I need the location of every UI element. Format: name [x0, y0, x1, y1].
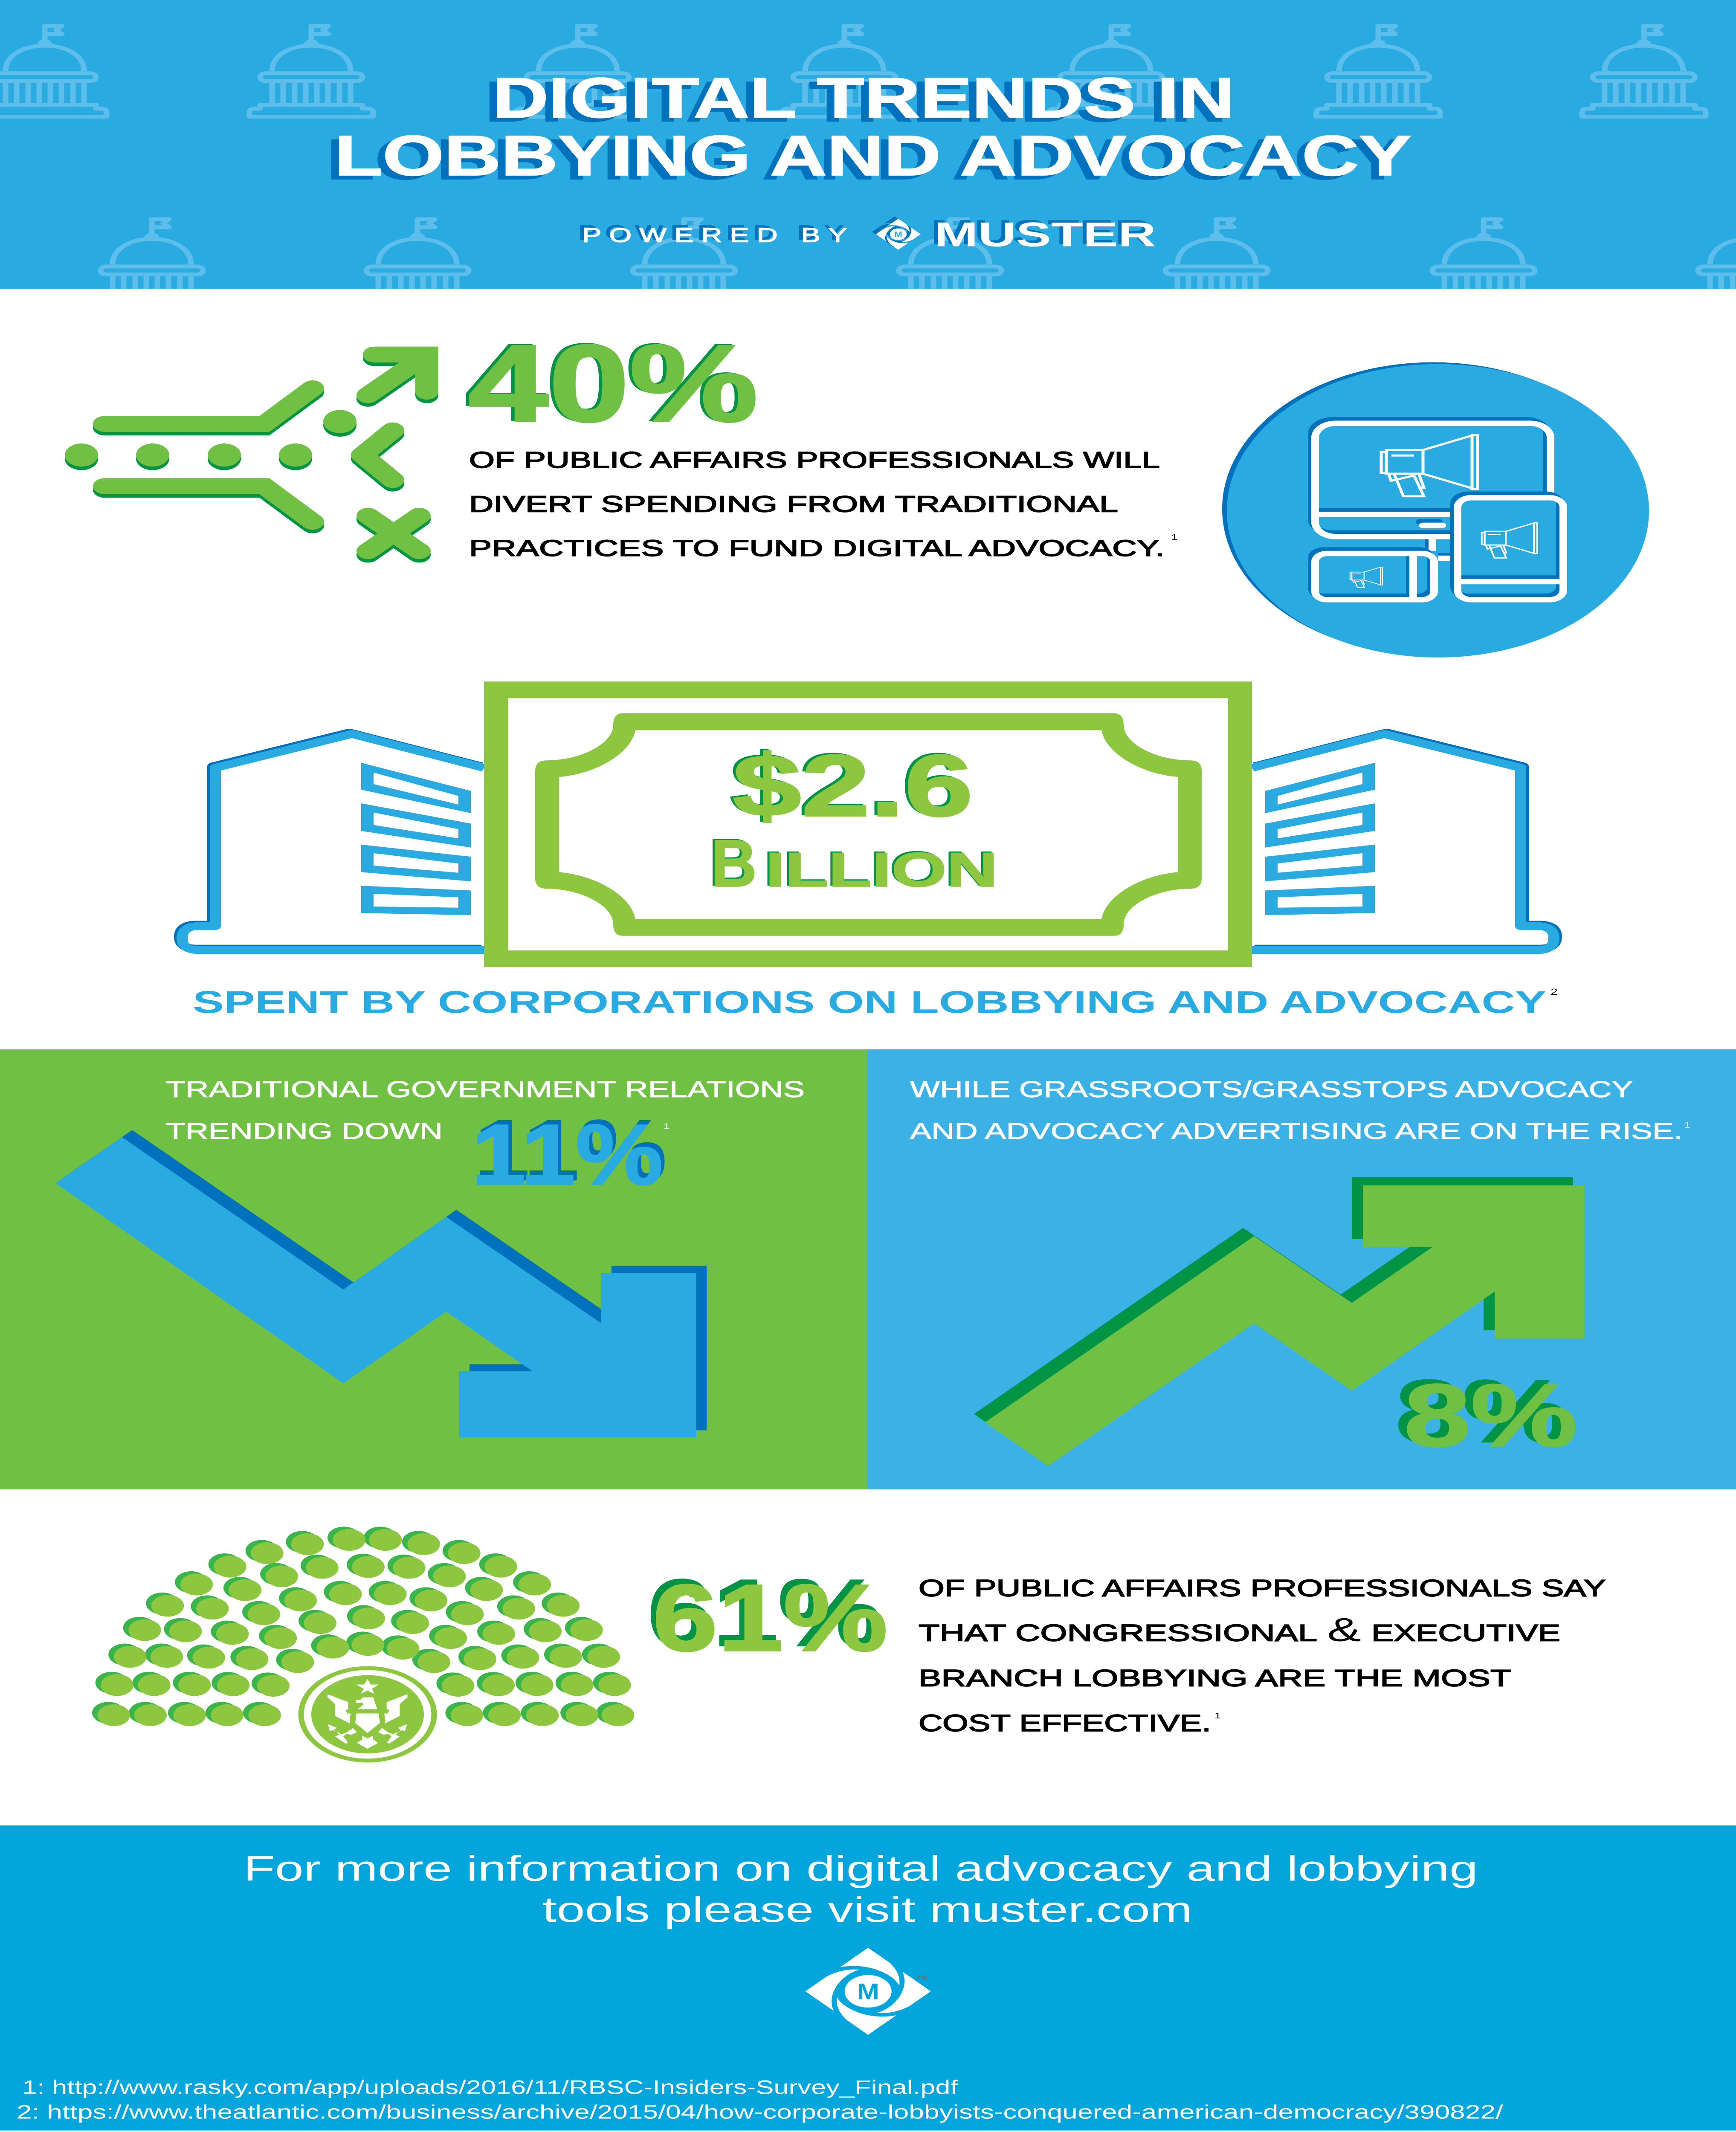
icon: banknote — [496, 690, 1240, 959]
panel: grassroots on the rise — [867, 1049, 1736, 1489]
panel: traditional trending down — [0, 1049, 867, 1489]
stat: billion: ILLION — [765, 843, 998, 897]
stat: 11%: 11% — [471, 1107, 663, 1202]
icon: medium megaphone — [1482, 523, 1537, 558]
text: 61 percent description: & — [1327, 1611, 1361, 1648]
title: LOBBYING AND ADVOCACY — [334, 124, 1411, 188]
text: 40 percent description: PRACTICES TO FUND DIGITAL ADVOCACY. — [469, 536, 1165, 561]
stat: 61%: 61% — [652, 1565, 888, 1671]
stat: $2.6: $2.6 — [733, 737, 973, 834]
text: 61 percent description: THAT CONGRESSIONAL — [919, 1620, 1317, 1646]
icon: muster logo: TM — [916, 1976, 927, 1981]
tablet — [1311, 550, 1438, 603]
title: LOBBYING AND ADVOCACY — [327, 128, 1404, 191]
arrow: down trend — [55, 1130, 707, 1437]
text: traditional government relations — [166, 1077, 805, 1144]
stat: $2.6: $2.6 — [730, 736, 970, 833]
text: 40 percent description: DIVERT SPENDING FROM TRADITIONAL — [469, 491, 1118, 517]
text: 40 percent description: OF PUBLIC AFFAIRS PROFESSIONALS WILL — [469, 447, 1160, 473]
icon: muster logo small: M — [894, 230, 902, 239]
text: grassroots description: WHILE GRASSROOTS/GRASSTOPS ADVOCACY — [910, 1077, 1633, 1102]
arrow: up trend — [974, 1177, 1584, 1466]
text: grassroots description: AND ADVOCACY ADVERTISING ARE ON THE RISE. — [910, 1118, 1683, 1144]
stat: billion — [709, 825, 998, 901]
text: call to action: For more information on digital advocacy and lobbying — [243, 1848, 1478, 1888]
stat: 40%: 40% — [468, 322, 758, 445]
powered by label: POWERED BY — [582, 224, 847, 246]
panel: header — [0, 0, 1736, 310]
text: 40 percent description — [469, 447, 1178, 561]
text: call to action: tools please visit muster.com — [542, 1889, 1192, 1929]
stat: billion: B — [711, 826, 757, 901]
icon: large megaphone — [1381, 435, 1478, 496]
text: footnote sources: 1: http://www.rasky.com/app/uploads/2016/11/RBSC-Insiders-Survey_Final.pdf — [22, 2077, 958, 2098]
capitol building background pattern — [0, 26, 1736, 310]
text: traditional government relations: TRADITIONAL GOVERNMENT RELATIONS — [166, 1077, 805, 1102]
text: spent by corporations: SPENT BY CORPORATIONS ON LOBBYING AND ADVOCACY — [193, 985, 1546, 1020]
icon: devices with megaphones — [1222, 362, 1649, 658]
text: traditional government relations: 1 — [664, 1122, 669, 1130]
stat: 11%: 11% — [475, 1102, 667, 1198]
icon: congressional seating — [92, 1527, 634, 1726]
icon: left building — [180, 733, 484, 950]
icon: muster logo — [806, 1948, 931, 2035]
powered by label: POWERED BY — [578, 222, 843, 244]
text: 61 percent description: 1 — [1214, 1711, 1221, 1720]
text: footnote sources — [17, 2077, 1503, 2123]
panel: footer — [0, 1825, 1736, 2131]
text: 61 percent description — [919, 1575, 1606, 1736]
icon: funnel with arrow, chevron and cross — [81, 354, 427, 555]
stat: 8%: 8% — [1404, 1365, 1577, 1465]
text: 61 percent description: EXECUTIVE — [1371, 1620, 1560, 1646]
icon: muster logo small — [872, 216, 921, 250]
text: traditional government relations: TRENDING DOWN — [166, 1118, 443, 1144]
text: grassroots description — [910, 1077, 1690, 1144]
stat: 61%: 61% — [647, 1560, 883, 1666]
text: 61 percent description: BRANCH LOBBYING ARE THE MOST — [919, 1665, 1511, 1692]
stat: billion: ILLION — [763, 841, 996, 895]
stat: billion: B — [709, 825, 755, 900]
panel: 40 percent stat — [81, 321, 1649, 658]
panel: 2.6 billion spending — [180, 690, 1558, 1020]
panel: 61 percent stat — [92, 1527, 1606, 1761]
text: footnote sources: 2: https://www.theatlantic.com/business/archive/2015/04/how-corporate-lobbyists-conquered-american-democracy/390822/ — [17, 2101, 1503, 2123]
phone — [1454, 494, 1567, 603]
text: grassroots description: 1 — [1684, 1121, 1690, 1130]
title: DIGITAL TRENDS IN — [493, 66, 1235, 130]
monitor — [1312, 420, 1551, 558]
icon: small megaphone — [1350, 567, 1382, 588]
text: 40 percent description: 1 — [1171, 533, 1178, 542]
title — [327, 66, 1411, 191]
icon: eagle seal — [301, 1668, 434, 1761]
title: DIGITAL TRENDS IN — [485, 70, 1227, 133]
text: 61 percent description: COST EFFECTIVE. — [919, 1710, 1211, 1736]
muster wordmark: MUSTER — [930, 213, 1152, 252]
stat: 8%: 8% — [1395, 1361, 1569, 1461]
icon: right building — [1252, 733, 1556, 950]
icon: muster logo: M — [857, 1979, 879, 2004]
stat: 40%: 40% — [465, 321, 755, 444]
text: 61 percent description: OF PUBLIC AFFAIRS PROFESSIONALS SAY — [919, 1575, 1606, 1602]
text: call to action — [243, 1848, 1478, 1929]
text: spent by corporations: 2 — [1551, 987, 1558, 997]
muster wordmark: MUSTER — [934, 216, 1156, 254]
